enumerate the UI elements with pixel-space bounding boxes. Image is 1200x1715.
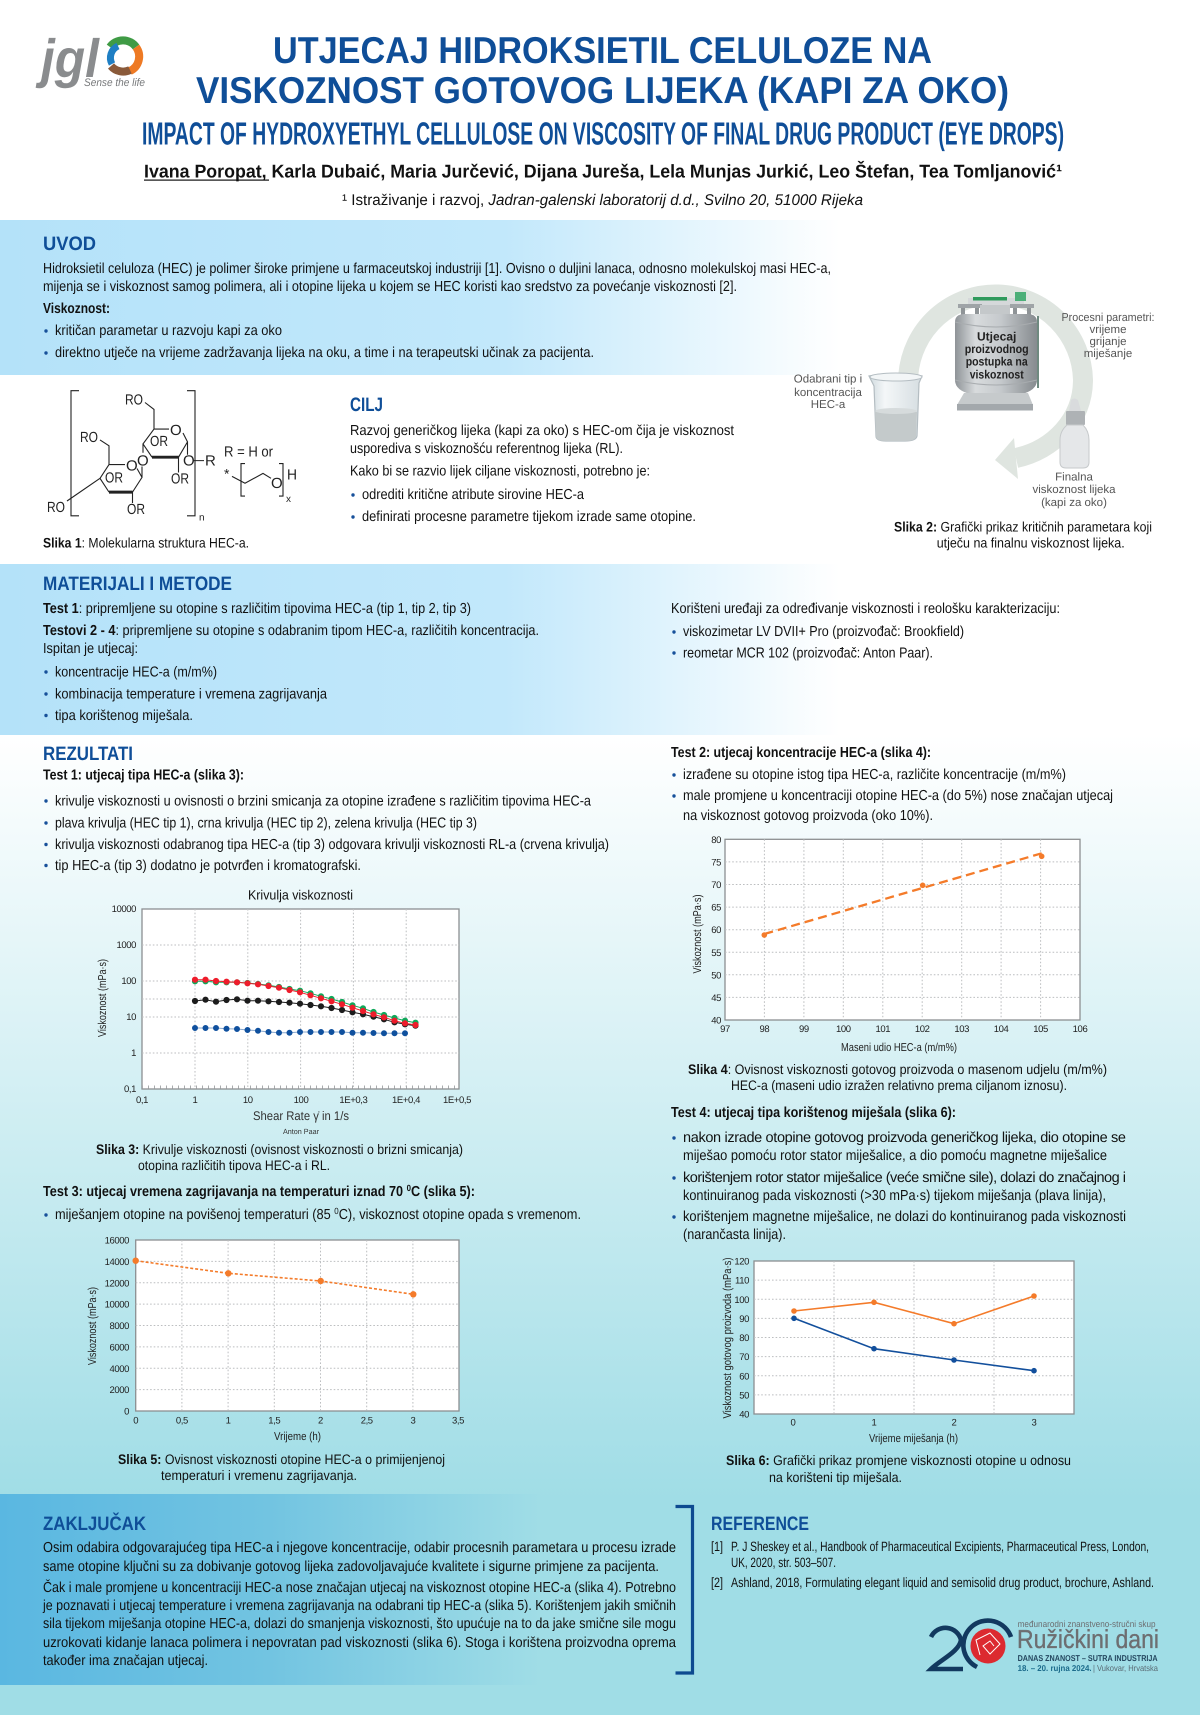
text: cilj: Razvoj generičkog lijeka (kapi za oko) s HEC-om čija je viskoznost: [350, 423, 734, 439]
logo: ruzickini dani: 18. – 20. rujna 2024.: [1018, 1663, 1092, 1673]
label: finalna viskoznost: [1032, 472, 1116, 509]
title block: [142, 29, 1064, 209]
series: orange dashed trend: [762, 853, 1044, 938]
label: finalna viskoznost: (kapi za oko): [1041, 497, 1107, 509]
caption: slika 5: temperaturi i vremenu zagrijavanja.: [161, 1468, 357, 1483]
text: devices: viskozimetar LV DVII+ Pro (proizvođač: Brookfield): [683, 624, 964, 640]
text: uvod intro: Hidroksietil celuloza (HEC) je polimer široke primjene u farmaceutskoj industriji [1]. Ovisno o duljini lanaca, odnosno molekulskoj masi HEC-a,: [43, 261, 831, 277]
caption: slika 2: Slika 2: Grafički prikaz kritičnih parametara koji: [894, 520, 1152, 535]
caption: slika 6: na korišteni tip miješala.: [769, 1470, 902, 1485]
text: test 4: [671, 1105, 1126, 1243]
figure: molecular structure of HEC: x: [286, 494, 291, 505]
logo: ruzickini dani: Ružičkini dani: [1017, 1624, 1159, 1654]
series: orange magnetic mixer: [791, 1293, 1037, 1326]
caption: slika 4: HEC-a (maseni udio izražen relativno prema ciljanom iznosu).: [731, 1078, 1067, 1093]
chart: viskoznost vs maseni udio (slika 4): 70: [711, 880, 721, 891]
heading: uvod: UVOD: [43, 233, 96, 255]
chart: viskoznost vs maseni udio (slika 4): Maseni udio HEC-a (m/m%): [841, 1042, 957, 1054]
arrow: circular process: [908, 294, 1083, 479]
chart: krivulja viskoznosti (slika 3): 1: [193, 1095, 198, 1106]
chart: krivulja viskoznosti (slika 3): [97, 888, 471, 1136]
chart: viskoznost vs maseni udio (slika 4): 101: [875, 1024, 890, 1035]
text: cilj: odrediti kritične atribute sirovine HEC-a: [362, 487, 585, 503]
figure: molecular structure of HEC: OR: [171, 470, 189, 487]
label: procesni parametri: [1062, 312, 1154, 360]
chart: viskoznost vs maseni udio (slika 4): 55: [711, 948, 721, 959]
text: test 3: miješanjem otopine na povišenoj temperaturi (85: [55, 1207, 368, 1223]
figure: molecular structure of HEC: O: [126, 458, 138, 474]
text: reference list: [1]: [711, 1539, 723, 1554]
heading: zakljucak: ZAKLJUČAK: [43, 1512, 146, 1535]
series: blue, HEC tip 1: [195, 1028, 405, 1033]
chart: krivulja viskoznosti (slika 3): Shear Rate γ̇ in 1/s: [253, 1109, 349, 1123]
chart: viskoznost vs vrijeme mijesanja (slika 6): 110: [735, 1276, 749, 1287]
text: zakljucak: [42, 1540, 677, 1669]
caption: slika 3: Slika 3: Krivulje viskoznosti (ovisnost viskoznosti o brizni smicanja): [96, 1142, 463, 1157]
text: reference list: [711, 1539, 1154, 1590]
text: uvod intro: mijenja se i viskoznost samog polimera, ali i otopine lijeka u kojem se HEC koristi kao sredstvo za povećanje viskoznosti [2].: [43, 279, 737, 295]
text: devices: Korišteni uređaji za određivanje viskoznosti i reološku karakterizaciju:: [671, 601, 1060, 617]
chart: viskoznost vs maseni udio (slika 4): 106: [1073, 1024, 1087, 1035]
text: test 3: C (slika 5):: [411, 1184, 475, 1200]
chart: viskoznost vs maseni udio (slika 4): 98: [760, 1024, 769, 1035]
icon: tank: postupka na: [966, 355, 1028, 369]
label: odabrani tip: HEC-a: [811, 399, 846, 411]
title: Croatian: [196, 29, 1009, 111]
figure: molecular structure of HEC: O: [170, 422, 182, 439]
text: zakljucak: također ima značajan utjecaj.: [43, 1653, 208, 1669]
label: finalna viskoznost: Finalna: [1055, 472, 1093, 484]
caption: slika 3: otopina različitih tipova HEC-a i RL.: [138, 1158, 330, 1173]
text: cilj: usporediva s viskoznošću referentnog lijeka (RL).: [350, 441, 623, 457]
series: orange dotted: [132, 1258, 416, 1298]
chart: viskoznost vs vrijeme mijesanja (slika 6): 1: [872, 1418, 877, 1428]
chart: viskoznost vs vrijeme (slika 5): 2: [318, 1416, 323, 1426]
logo: ruzickini dani: [931, 1619, 1159, 1673]
chart: viskoznost vs vrijeme (slika 5): 1: [226, 1416, 231, 1426]
chart: viskoznost vs vrijeme (slika 5): 4000: [109, 1364, 129, 1375]
figure: molecular structure of HEC: O: [183, 453, 195, 469]
figure: molecular structure of HEC: R: [205, 453, 216, 469]
chart: viskoznost vs maseni udio (slika 4): [692, 835, 1087, 1054]
title: Croatian: VISKOZNOST GOTOVOG LIJEKA (KAPI ZA OKO): [196, 69, 1009, 111]
label: odabrani tip: koncentracija: [794, 387, 862, 399]
chart: viskoznost vs vrijeme mijesanja (slika 6): 40: [739, 1410, 749, 1420]
text: zakljucak: je poznavati i utjecaj temperature i vremena zagrijavanja na odabrani tip HEC-a (slika 5). Korištenjem jakih smičnih: [42, 1598, 676, 1614]
heading: reference: REFERENCE: [711, 1513, 809, 1535]
authors: Ivana Poropat, Karla Dubaić, Maria Jurčević, Dijana Jureša, Lela Munjas Jurkić, Leo Štefan, Tea Tomljanović¹: [144, 160, 1062, 182]
text: devices: reometar MCR 102 (proizvođač: Anton Paar).: [683, 646, 933, 662]
caption: slika 2: [894, 520, 1152, 551]
text: tests: Test 1: pripremljene su otopine s različitim tipovima HEC-a (tip 1, tip 2, tip 3): [43, 601, 471, 617]
caption: slika 1: Slika 1: Molekularna struktura HEC-a.: [43, 536, 249, 550]
title: Croatian: UTJECAJ HIDROKSIETIL CELULOZE NA: [273, 29, 932, 71]
text: test 3: C), viskoznost otopine opada s vremenom.: [339, 1207, 581, 1223]
chart: viskoznost vs maseni udio (slika 4): 75: [711, 858, 721, 868]
chart: viskoznost vs maseni udio (slika 4): 40: [711, 1016, 721, 1026]
icon: tank: Utjecaj: [977, 330, 1016, 344]
caption: slika 5: Slika 5: Ovisnost viskoznosti otopine HEC-a o primijenjenoj: [118, 1452, 445, 1467]
bracket divider: [676, 1506, 692, 1673]
series: black, HEC tip 2: [195, 999, 416, 1026]
text: test 3: Test 3: utjecaj vremena zagrijavanja na temperaturi iznad 70: [43, 1184, 455, 1200]
chart: viskoznost vs vrijeme (slika 5): 3: [410, 1416, 415, 1426]
chart: krivulja viskoznosti (slika 3): 10000: [112, 904, 136, 915]
chart: viskoznost vs maseni udio (slika 4): 97: [720, 1024, 730, 1035]
logo: ruzickini dani: DANAS ZNANOST – SUTRA INDUSTRIJA: [1018, 1653, 1158, 1663]
chart: viskoznost vs vrijeme (slika 5): 0: [124, 1406, 129, 1418]
text: test 2: izrađene su otopine istog tipa HEC-a, različite koncentracije (m/m%): [683, 767, 1066, 783]
caption: slika 6: [726, 1453, 1071, 1485]
label: procesni parametri: Procesni parametri:: [1062, 312, 1154, 324]
text: test 4: (narančasta linija).: [683, 1227, 786, 1243]
chart: krivulja viskoznosti (slika 3): Anton Paar: [283, 1127, 319, 1136]
text: reference list: [2]: [711, 1575, 723, 1590]
logo: jgl: jgl: [35, 29, 100, 89]
figure: molecular structure of HEC: O: [271, 475, 283, 492]
figure: process diagram slika 2: [794, 292, 1154, 509]
series: green, HEC tip 3: [195, 981, 416, 1023]
figure: molecular structure of HEC: O: [137, 453, 149, 469]
chart: viskoznost vs maseni udio (slika 4): 80: [711, 835, 721, 846]
figure: molecular structure of HEC: RO: [80, 429, 98, 446]
figure: molecular structure of HEC: R = H or: [224, 444, 273, 461]
icon: tank: proizvodnog: [965, 342, 1029, 356]
text: test 3: 0: [334, 1206, 339, 1216]
text: test 3: 0: [407, 1183, 411, 1193]
chart: viskoznost vs maseni udio (slika 4): 99: [799, 1024, 809, 1035]
figure: molecular structure of HEC: OR: [127, 501, 145, 518]
chart: viskoznost vs vrijeme (slika 5): 12000: [105, 1278, 129, 1289]
label: odabrani tip: Odabrani tip i: [794, 374, 862, 386]
logo: jgl: Sense the life: [84, 77, 145, 89]
chart: krivulja viskoznosti (slika 3): 1: [131, 1048, 136, 1059]
text: viskoznost list: Viskoznost:: [43, 301, 110, 317]
text: tests: Ispitan je utjecaj:: [43, 641, 138, 657]
text: tests: [43, 601, 539, 724]
text: test 4: korištenjem rotor stator miješalice (veće smične sile), dolazi do značajnog i: [683, 1170, 1126, 1186]
text: tests: Testovi 2 - 4: pripremljene su otopine s odabranim tipom HEC-a, različitih koncentracija.: [43, 623, 539, 639]
text: test 1: krivulje viskoznosti u ovisnosti o brzini smicanja za otopine izrađene s različitim tipovima HEC-a: [55, 794, 592, 810]
chart: viskoznost vs maseni udio (slika 4): 60: [711, 925, 721, 936]
chart: viskoznost vs vrijeme (slika 5): 8000: [109, 1321, 129, 1332]
figure: molecular structure of HEC: RO: [47, 499, 65, 516]
panel: uvod: [43, 233, 831, 361]
text: test 4: korištenjem magnetne miješalice, ne dolazi do kontinuiranog pada viskoznosti: [683, 1209, 1126, 1225]
figure: molecular structure of HEC: n: [199, 513, 205, 524]
chart: krivulja viskoznosti (slika 3): 100: [121, 976, 136, 987]
caption: slika 3: [96, 1142, 463, 1173]
chart: viskoznost vs maseni udio (slika 4): 104: [994, 1024, 1009, 1035]
caption: slika 4: [688, 1062, 1107, 1093]
chart: viskoznost vs vrijeme mijesanja (slika 6): 100: [734, 1295, 749, 1306]
chart: viskoznost vs maseni udio (slika 4): 105: [1033, 1024, 1048, 1035]
text: zakljucak: Osim odabira odgovarajućeg tipa HEC-a i njegove koncentracije, odabir procesnih parametara u procesu izrade: [43, 1540, 676, 1556]
text: devices: [671, 601, 1060, 662]
chart: viskoznost vs vrijeme (slika 5): 10000: [105, 1300, 129, 1311]
text: test 2: male promjene u koncentraciji otopine HEC-a (do 5%) nose značajan utjecaj: [683, 788, 1113, 804]
text: test 4: Test 4: utjecaj tipa korištenog miješala (slika 6):: [671, 1105, 956, 1121]
chart: viskoznost vs vrijeme (slika 5): Vrijeme (h): [274, 1431, 321, 1443]
figure: molecular structure of HEC: H: [287, 467, 297, 483]
chart: viskoznost vs vrijeme mijesanja (slika 6): 70: [739, 1352, 749, 1363]
text: zakljucak: sila tijekom miješanja otopine HEC-a, dolazi do smanjenja viskoznosti, što upućuje na to da jake smične sile mogu: [43, 1616, 676, 1632]
chart: viskoznost vs vrijeme (slika 5): 14000: [105, 1257, 129, 1268]
chart: viskoznost vs maseni udio (slika 4): 65: [711, 903, 721, 914]
text: test 2: na viskoznost gotovog proizvoda (oko 10%).: [683, 808, 933, 824]
heading: rezultati: REZULTATI: [43, 743, 133, 765]
chart: viskoznost vs maseni udio (slika 4): 102: [915, 1024, 930, 1035]
chart: viskoznost vs vrijeme mijesanja (slika 6): Viskoznost gotovog proizvoda (mPa·s): [722, 1257, 734, 1418]
text: test 1: tip HEC-a (tip 3) dodatno je potvrđen i kromatografski.: [55, 858, 361, 874]
chart: viskoznost vs vrijeme (slika 5): 2,5: [361, 1416, 373, 1426]
chart: viskoznost vs vrijeme (slika 5): 16000: [105, 1236, 129, 1246]
chart: viskoznost vs vrijeme (slika 5): 0,5: [176, 1416, 188, 1426]
text: test 1: Test 1: utjecaj tipa HEC-a (slika 3):: [43, 768, 244, 784]
chart: viskoznost vs vrijeme mijesanja (slika 6): 3: [1032, 1418, 1037, 1428]
text: tests: kombinacija temperature i vremena zagrijavanja: [55, 686, 328, 702]
chart: viskoznost vs vrijeme (slika 5): 1,5: [268, 1416, 280, 1426]
chart: viskoznost vs vrijeme mijesanja (slika 6): [722, 1256, 1074, 1445]
chart: viskoznost vs maseni udio (slika 4): Viskoznost (mPa·s): [692, 894, 704, 974]
chart: viskoznost vs vrijeme mijesanja (slika 6): 50: [739, 1390, 749, 1401]
chart: krivulja viskoznosti (slika 3): 1000: [116, 940, 136, 951]
chart: krivulja viskoznosti (slika 3): 1E+0,4: [392, 1095, 420, 1106]
figure: molecular structure of HEC: OR: [105, 469, 123, 486]
chart: viskoznost vs maseni udio (slika 4): 50: [711, 970, 721, 981]
caption: slika 2: utječu na finalnu viskoznost lijeka.: [937, 536, 1125, 551]
series: blue rotor stator: [791, 1316, 1037, 1373]
panel: cilj: [350, 394, 734, 525]
text: test 4: nakon izrade otopine gotovog proizvoda generičkog lijeka, dio otopine se: [683, 1130, 1126, 1146]
label: finalna viskoznost: viskoznost lijeka: [1032, 484, 1116, 496]
chart: krivulja viskoznosti (slika 3): 100: [294, 1095, 308, 1106]
text: test 4: miješao pomoću rotor stator miješalice, a dio pomoću magnetne miješalice: [683, 1148, 1107, 1164]
icon: beaker: [869, 373, 922, 441]
panel: materijali i metode: [43, 573, 1060, 724]
caption: slika 4: Slika 4: Ovisnost viskoznosti gotovog proizvoda o masenom udjelu (m/m%): [688, 1062, 1107, 1077]
text: test 1: plava krivulja (HEC tip 1), crna krivulja (HEC tip 2), zelena krivulja (HEC tip 3): [55, 816, 477, 832]
chart: krivulja viskoznosti (slika 3): Krivulja viskoznosti: [248, 888, 353, 902]
chart: viskoznost vs maseni udio (slika 4): 103: [954, 1024, 969, 1035]
text: viskoznost list: direktno utječe na vrijeme zadržavanja lijeka na oku, a time i na terapeutski učinak za pacijenta.: [55, 345, 594, 361]
text: test 2: [671, 745, 1113, 824]
chart: krivulja viskoznosti (slika 3): 0,1: [136, 1095, 148, 1106]
chart: viskoznost vs vrijeme mijesanja (slika 6): 80: [739, 1333, 749, 1344]
chart: viskoznost vs vrijeme (slika 5): 2000: [109, 1385, 129, 1396]
heading: cilj: CILJ: [350, 394, 383, 416]
label: procesni parametri: grijanje: [1089, 336, 1127, 348]
text: test 4: kontinuiranog pada viskoznosti (>30 mPa·s) tijekom miješanja (plava linija),: [683, 1188, 1106, 1204]
chart: viskoznost vs vrijeme mijesanja (slika 6): 90: [739, 1314, 749, 1325]
logo: ruzickini dani: | Vukovar, Hrvatska: [1093, 1663, 1158, 1673]
text: reference list: UK, 2020, str. 503–507.: [731, 1555, 836, 1570]
affiliation: ¹ Istraživanje i razvoj, Jadran-galenski laboratorij d.d., Svilno 20, 51000 Rijeka: [342, 192, 863, 209]
text: zakljucak: uzrokovati kidanje lanaca polimera i nepovratan pad viskoznosti (slika 6). Stoga i korištena proizvodna oprema: [43, 1635, 677, 1651]
chart: viskoznost vs vrijeme mijesanja (slika 6): 60: [739, 1371, 749, 1382]
chart: viskoznost vs vrijeme mijesanja (slika 6): 2: [952, 1418, 957, 1428]
figure: molecular structure of HEC: OR: [150, 433, 168, 450]
text: tests: koncentracije HEC-a (m/m%): [55, 664, 217, 680]
chart: viskoznost vs vrijeme mijesanja (slika 6): 120: [734, 1256, 749, 1268]
panel: reference: [711, 1513, 1154, 1590]
chart: viskoznost vs vrijeme mijesanja (slika 6): 0: [791, 1418, 796, 1428]
label: procesni parametri: vrijeme: [1089, 324, 1127, 336]
chart: krivulja viskoznosti (slika 3): 1E+0,3: [339, 1095, 367, 1106]
chart: viskoznost vs vrijeme (slika 5): 6000: [109, 1342, 129, 1353]
text: tests: tipa korištenog miješala.: [55, 708, 193, 724]
figure: molecular structure of HEC: RO: [125, 392, 143, 408]
chart: viskoznost vs vrijeme (slika 5): 3,5: [452, 1416, 464, 1426]
icon: tank: [955, 292, 1039, 410]
text: zakljucak: Čak i male promjene u koncentraciji HEC-a nose značajan utjecaj na viskoznost otopine HEC-a (slika 4). Potrebno: [43, 1579, 676, 1596]
text: test 3: [43, 1183, 581, 1223]
text: viskoznost list: kritičan parametar u razvoju kapi za oko: [55, 323, 282, 339]
text: test 1: [43, 768, 609, 874]
text: cilj: [350, 423, 734, 525]
panel: zakljucak: [42, 1512, 677, 1669]
logo: ruzickini dani: međunarodni znanstveno-stručni skup: [1018, 1619, 1156, 1629]
icon: eye dropper bottle: [1060, 398, 1089, 468]
text: test 1: krivulja viskoznosti odabranog tipa HEC-a (tip 3) odgovara krivulji viskoznosti RL-a (crvena krivulja): [55, 837, 609, 853]
text: cilj: Kako bi se razvio lijek ciljane viskoznosti, potrebno je:: [350, 464, 650, 480]
caption: slika 5: [118, 1452, 445, 1483]
icon: tank: viskoznost: [970, 367, 1024, 381]
text: cilj: definirati procesne parametre tijekom izrade same otopine.: [362, 509, 696, 525]
caption: slika 6: Slika 6: Grafički prikaz promjene viskoznosti otopine u odnosu: [726, 1453, 1071, 1468]
heading: materijali i metode: MATERIJALI I METODE: [43, 573, 232, 595]
chart: viskoznost vs vrijeme mijesanja (slika 6): Vrijeme miješanja (h): [869, 1433, 958, 1445]
text: zakljucak: same otopine ključni su za dobivanje gotovog lijeka zadovoljavajuće kvalitete i sigurne primjene za pacijenta.: [43, 1559, 659, 1575]
chart: krivulja viskoznosti (slika 3): 10: [243, 1095, 253, 1106]
logo: jgl: [35, 29, 145, 89]
text: test 2: Test 2: utjecaj koncentracije HEC-a (slika 4):: [671, 745, 931, 761]
chart: krivulja viskoznosti (slika 3): 1E+0,5: [443, 1095, 471, 1106]
chart: viskoznost vs vrijeme (slika 5): 0: [133, 1416, 138, 1426]
figure: molecular structure of HEC: *: [224, 466, 230, 481]
chart: viskoznost vs vrijeme (slika 5): [87, 1236, 464, 1443]
chart: viskoznost vs maseni udio (slika 4): 45: [711, 993, 721, 1004]
chart: krivulja viskoznosti (slika 3): 10: [126, 1012, 136, 1023]
chart: viskoznost vs vrijeme (slika 5): Viskoznost (mPa·s): [87, 1287, 99, 1365]
label: procesni parametri: miješanje: [1084, 348, 1132, 360]
chart: viskoznost vs maseni udio (slika 4): 100: [836, 1024, 851, 1035]
chart: krivulja viskoznosti (slika 3): Viskoznost (mPa·s): [97, 959, 109, 1037]
figure: molecular structure of HEC: [47, 391, 297, 524]
label: odabrani tip: [794, 374, 862, 411]
series: red, reference drug: [195, 980, 416, 1025]
text: uvod intro: [43, 261, 831, 295]
chart: krivulja viskoznosti (slika 3): 0,1: [124, 1084, 136, 1095]
text: viskoznost list: [43, 301, 594, 361]
